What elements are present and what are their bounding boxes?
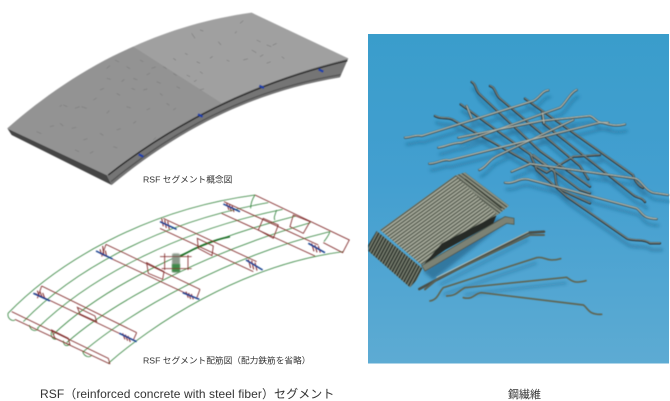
caption: steel fiber: 鋼繊維 [508,387,541,401]
centre lifting fitting [160,253,192,273]
concrete segment 3D concept drawing [7,13,348,185]
blue tie bolts with stirrups [33,203,325,342]
fiber shadows [440,240,567,295]
blue bolt 2 [198,114,203,117]
segment side face [107,58,348,185]
reinforcement wireframe drawing [8,195,349,364]
thin fiber stack [419,232,544,289]
bundle top face [380,173,508,265]
blue bolt 4 [319,69,323,72]
green longitudinal arcs [8,195,343,363]
bundle front fold [368,231,422,287]
bundle end flap [455,172,509,215]
segment top surface right [7,13,348,175]
bundle shadow [423,218,507,280]
photo: steel fibers on blue background [368,34,670,364]
red transverse bars [12,195,349,364]
blue bolt 3 [259,86,264,88]
loose fibers pile [405,81,670,250]
surface fibre speckles [37,21,284,153]
green stirrups [8,195,330,357]
fiber shadows [407,89,670,250]
caption: RSF segment: RSF（reinforced concrete with steel fiber）セグメント [40,387,334,401]
blue bolt 1 [139,154,143,157]
light fibers [405,90,668,219]
joint line [108,61,347,175]
bundle dark underside [422,215,497,267]
segment end face [7,128,112,185]
photo background [368,34,669,364]
caption: concept drawing: RSF セグメント概念図 [143,174,232,184]
glued fiber bundle [368,172,514,287]
dark fibers [435,81,660,243]
segment top surface left [8,46,221,175]
separated fiber plate [422,217,514,271]
single fibers [419,232,602,314]
lower side edge [111,75,341,182]
caption: reinforcement drawing: RSF セグメント配筋図（配力鉄筋を省略） [143,354,310,366]
